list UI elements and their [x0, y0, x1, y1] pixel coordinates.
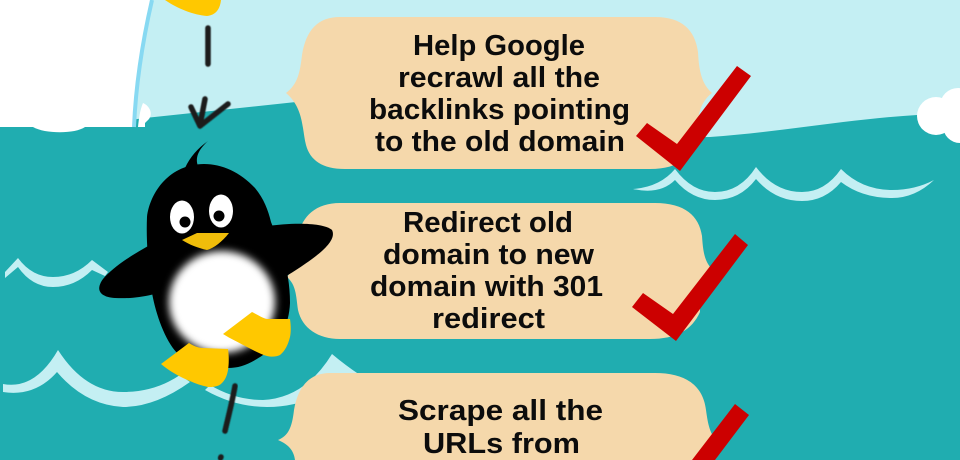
speech bubble 1	[286, 17, 712, 169]
penguin belly	[169, 251, 275, 353]
text: step 3	[398, 395, 603, 460]
penguin body	[147, 164, 290, 368]
text: step 2: redirect	[432, 303, 545, 335]
penguin right foot	[223, 312, 291, 357]
text: step 1: Help Google	[413, 30, 585, 62]
text: step 1: backlinks pointing	[369, 94, 630, 126]
penguin right eye	[209, 194, 233, 228]
speech bubble 2	[287, 203, 711, 339]
icon: check mark 3	[692, 404, 749, 460]
wave upper right	[633, 167, 934, 201]
arrow: dashed path into penguin	[191, 28, 228, 126]
icon: yellow foot at top	[165, 0, 221, 16]
text: step 2	[370, 207, 603, 335]
text: step 1: recrawl all the	[398, 62, 600, 94]
icon: check mark 1	[636, 66, 751, 171]
big wave lower left	[3, 350, 190, 407]
sky	[130, 0, 960, 140]
iceberg: white snow with blue edge	[0, 0, 152, 132]
text: step 1	[369, 30, 630, 158]
text: step 2: domain to new	[383, 239, 594, 271]
text: step 2: domain with 301	[370, 271, 603, 303]
cloud right	[917, 88, 960, 143]
text: step 3: Scrape all the	[398, 395, 603, 427]
penguin beak	[182, 233, 229, 250]
penguin	[99, 141, 333, 387]
text: step 1: to the old domain	[375, 126, 625, 158]
arrow: dashed path below penguin	[220, 386, 235, 458]
penguin left eye	[170, 200, 194, 234]
speech bubble 3	[278, 373, 716, 460]
icon: check mark 2	[632, 234, 748, 341]
penguin left wing	[99, 240, 180, 298]
penguin left foot	[161, 343, 229, 387]
text: step 3: URLs from	[423, 428, 580, 460]
big wave lower right	[205, 354, 360, 407]
penguin hair	[185, 141, 208, 168]
penguin right wing	[262, 224, 333, 290]
text: step 2: Redirect old	[403, 207, 573, 239]
wave upper left	[5, 258, 108, 287]
